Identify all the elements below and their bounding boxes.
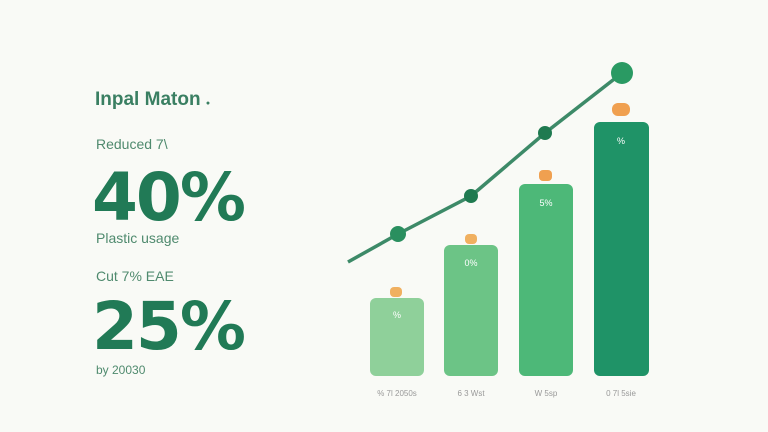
bar 2: 0% — [464, 258, 478, 268]
bar 4: 0 7l 5sie — [606, 389, 636, 398]
stat value 2: 25% — [92, 288, 244, 365]
bar 4 — [594, 103, 649, 398]
bar 3: 5% — [539, 198, 553, 208]
stat caption 1: Plastic usage — [96, 230, 179, 246]
stat caption 2: by 20030 — [96, 363, 145, 377]
title: Inpal Maton ● — [95, 89, 210, 110]
stat value 1: 40% — [92, 159, 244, 236]
bar 3: W 5sp — [535, 389, 558, 398]
bar 3 — [519, 170, 573, 398]
bar 2: 6 3 Wst — [457, 389, 485, 398]
bar 1: % — [393, 310, 401, 320]
stat label 2: Cut 7% EAE — [96, 268, 174, 284]
stat label 1: Reduced 7\ — [96, 136, 168, 152]
bar 1 — [370, 287, 424, 398]
bar 1: % 7l 2050s — [377, 389, 417, 398]
bar 4: % — [617, 136, 625, 146]
trend line — [348, 62, 633, 262]
bar 2 — [444, 234, 498, 398]
